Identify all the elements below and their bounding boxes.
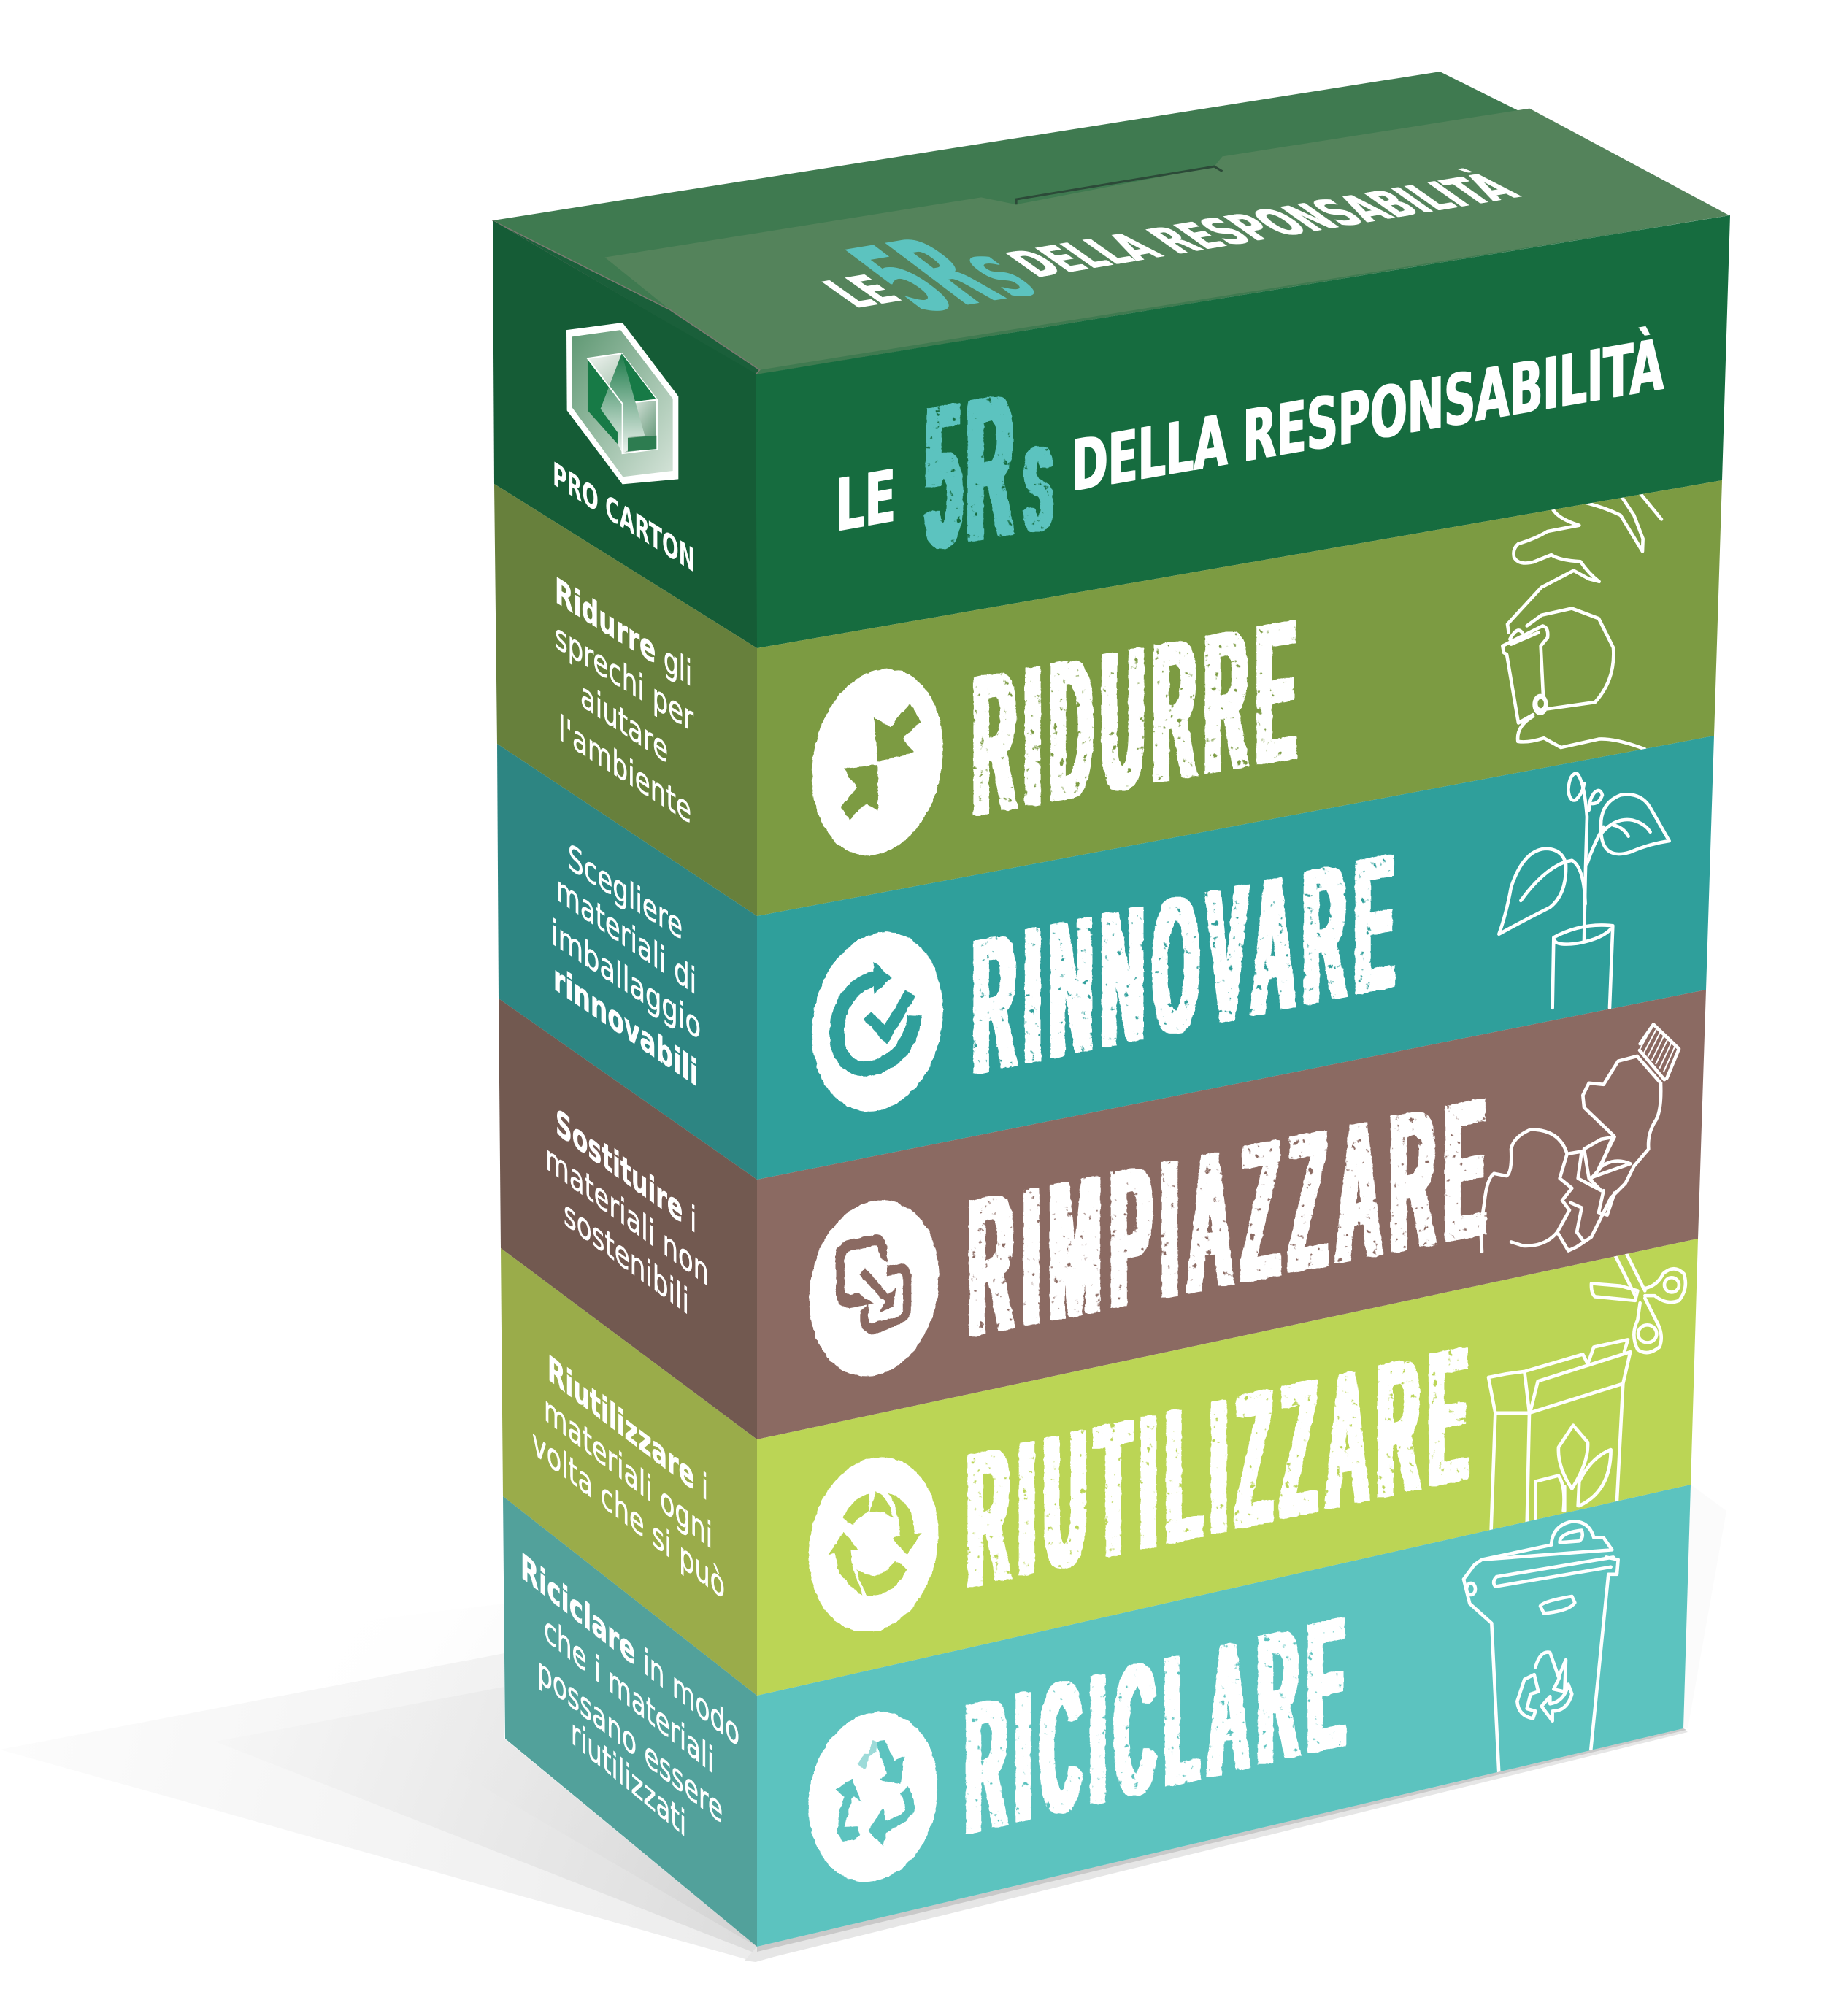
side text: ridurre: l'ambiente [558, 707, 691, 833]
badge: rinnovare cycle check [797, 920, 958, 1123]
side text: riciclare [520, 1544, 739, 1847]
badge: riciclare recycling [794, 1701, 952, 1893]
side face bands [493, 220, 757, 1947]
lid title [809, 166, 1532, 333]
badge: rimpiazzare swap [794, 1189, 953, 1388]
side text: rimpiazzare: sostenibili [564, 1191, 689, 1323]
side text: rimpiazzare: materiali non [545, 1136, 709, 1295]
side text: rinnovare [551, 836, 701, 1096]
badge: riutilizzare globe arrows [794, 1446, 953, 1643]
illustration: scissors and packaging [1488, 1252, 1686, 1529]
front flap with tab [605, 109, 1729, 370]
side text: riutilizzare: volta che si può [532, 1420, 725, 1608]
logo: pro carton hexagon [566, 323, 678, 484]
side text: riutilizzare: Riutilizzare i [548, 1346, 708, 1509]
slot [1016, 166, 1222, 204]
side text: ridurre: sprechi per [555, 615, 694, 741]
floor shadow [0, 1485, 1726, 1962]
title LE: LE [836, 453, 896, 549]
main title: 5R [926, 347, 1018, 593]
side text: rinnovare: Scegliere [568, 836, 683, 949]
side text: ridurre [555, 569, 694, 833]
main title: S [1025, 420, 1051, 559]
side text: rimpiazzare: Sostituire i [556, 1100, 696, 1242]
lid 5R: 5R [818, 220, 1034, 333]
lid LE: LE [809, 267, 915, 316]
side text: rimpiazzare [545, 1100, 709, 1323]
lid della responsabilità: DELLA RESPONSABILITÀ [994, 166, 1532, 285]
logo wordmark: PRO CARTON [553, 455, 695, 581]
side text: riciclare: riutilizzati [571, 1710, 686, 1847]
main title [836, 323, 1664, 593]
illustration: crushed plastic bottle [1480, 1024, 1679, 1252]
illustration: hand pinching bin [1502, 492, 1661, 749]
back flap [493, 72, 1729, 374]
side text: riciclare: che i materiali [544, 1607, 714, 1782]
illustration: wheelie bin [1464, 1521, 1618, 1774]
side text: rinnovare: rinnovabili [553, 956, 698, 1096]
illustration: seedling in pot [1499, 773, 1670, 1008]
side text: rinnovare: materiali di [556, 867, 696, 1004]
side fold [493, 220, 760, 374]
side text: riutilizzare: materiali ogni [544, 1386, 712, 1558]
side text: ridurre: aiutare [580, 673, 668, 772]
side text: riutilizzare [532, 1346, 725, 1608]
lid S: S [948, 245, 1059, 310]
front face bands [756, 215, 1730, 1947]
side text: riciclare: Riciclare in modo [520, 1544, 739, 1755]
side text: ridurre: Ridurre gli [555, 569, 692, 696]
box top lid [493, 72, 1729, 374]
side text: riciclare: possano essere [537, 1647, 723, 1833]
badge: ridurre arrows [796, 658, 958, 866]
side text: rinnovare: imballaggio [551, 911, 701, 1049]
